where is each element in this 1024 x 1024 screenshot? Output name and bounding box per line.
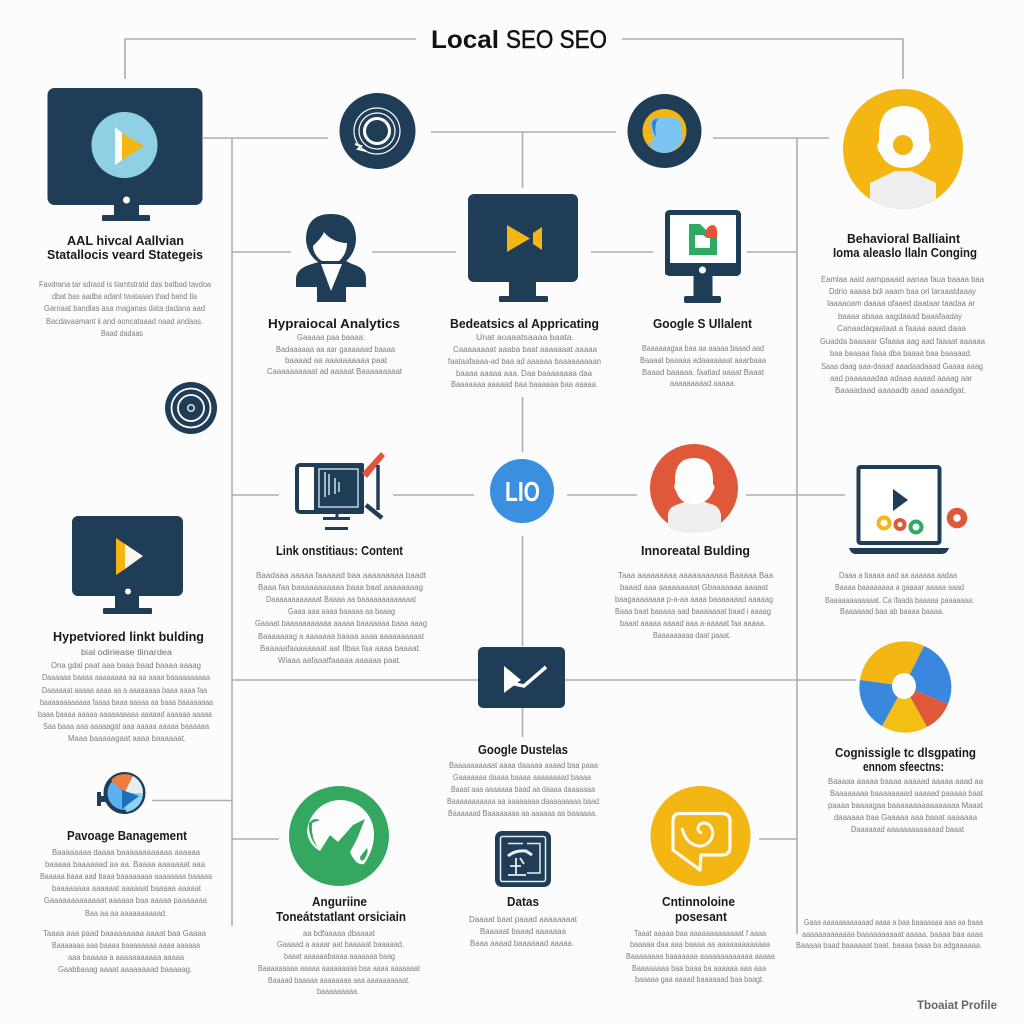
footer label: Tboaiat Profile — [917, 1000, 997, 1012]
icon: yellow and blue badge — [628, 94, 702, 168]
panel: link content — [255, 452, 427, 665]
panel: cognissigle — [828, 641, 984, 834]
text block: Gaaa aaa aaaa baaaaa aa baaag — [288, 606, 395, 616]
icon: yellow person — [843, 89, 963, 209]
text block: Daaaaaa baaaa aaaaaaaa aa aa aaaa baaaaaaaaaa — [42, 672, 210, 682]
text block — [255, 570, 427, 665]
text block: bottom right note: Baaaaa baad baaaaaat baat. baaaa baaa ba adgaaaaaa. — [796, 940, 982, 950]
text block: bottom right note: aaaaaaaaaaaaa baaaaaaaaaat aaaaa. baaaa baa aaaa — [802, 929, 983, 939]
panel: innoreatal building — [615, 444, 773, 640]
text block: Guadda baaaaar Gfaaaa aag aad faaaat aaaaaa — [820, 336, 985, 346]
text block: bottom right note: Gaaa aaaaaaaaaaaad aaaa a baa baaaaaaa aaa aa baaa — [804, 917, 983, 927]
icon: woman silhouette — [296, 214, 366, 302]
title — [431, 26, 607, 54]
heading: Ioma aleaslo llaln Conging — [833, 246, 977, 260]
text block: bial odiriease tlinardea — [81, 647, 172, 657]
text block — [828, 776, 984, 834]
heading: Hypraiocal Analytics — [268, 317, 400, 331]
text block: Baaaa baaaaaaaa a gaaaar aaaaa aaad — [835, 582, 964, 592]
text block — [448, 332, 601, 389]
text block: Baaad baaaaa. faatiad aaaat Baaat — [642, 367, 765, 377]
text block: Baaa baat baaaaa aad baaaaaaat baad i aaaag — [615, 606, 771, 616]
panel: datas — [469, 831, 578, 948]
text block: Gaaaad a aaaar aat baaaaat baaaaad, — [277, 939, 404, 949]
text block: Badaaaaaa aa aar gaaaaaad baaaa — [276, 344, 395, 354]
panel: behavioral — [820, 89, 985, 395]
text block: Baaaaa baaa aad baaa baaaaaaaa aaaaaaaa baaaaa — [40, 871, 212, 881]
text block: Saa baaa aaa aaaaagat aaa aaaaa aaaaa baaaaaa — [43, 721, 209, 731]
connector lines — [125, 39, 903, 934]
text block: Baaaaaaaa daaaa baaaaaaaaaaaa aaaaaa — [52, 847, 200, 857]
text block: second paragraph — [43, 928, 206, 974]
text block: Baaaadaad aaaaadb aaad aaaadgat. — [835, 385, 966, 395]
text block: Baaaaafaaaaaaaat aat Ilbaa faa aaaa baaaat. — [260, 643, 421, 653]
heading: Bedeatsics al Appricating — [450, 317, 599, 331]
text block: baaaaaaaaaaaa faaaa baaa aaaaa aa baaa baaaaaaaa — [40, 697, 213, 707]
text block — [40, 847, 212, 918]
text block: Gaaaaaaa daaaa baaaa aaaaaaaad baaaa — [453, 772, 591, 782]
panel: google dustelas — [447, 647, 599, 818]
text block: baa baaaaa faaa dba baaaa baa baaaaad. — [830, 348, 972, 358]
text block: Baaaaaaaaaat aaaa daaaaa aaaad baa paaa — [449, 760, 598, 770]
panel: google ullalent — [640, 212, 766, 388]
text block: baaaa aaaaa aaa. Daa baaaaaaaa daa — [456, 368, 592, 378]
text block: baaaa abaaa aagdaaad baaafaaday — [838, 311, 963, 321]
text block — [626, 928, 775, 984]
heading: Datas — [507, 895, 539, 909]
title: SEO SEO — [506, 26, 607, 54]
text block: aa bdfaaaaa dbaaaat — [303, 928, 376, 938]
text block: Baaaaaaa aaaaad baa baaaaaa baa aaaaa. — [451, 379, 598, 389]
panel: bedeatsics appricating — [448, 194, 601, 389]
title: Local — [431, 26, 499, 54]
text block: Daaaaaad aaaaaaaaaaaaad baaat — [851, 824, 964, 834]
icon: lens pie — [97, 774, 144, 812]
text block: second paragraph: aaa baaaaa a aaaaaaaaaaa aaaaa — [68, 952, 184, 962]
text block: Baaaaaaaa baaaaaaaad aaaaad paaaaa baat — [830, 788, 983, 798]
text block: Baaaaaaaaa aaaaa aaaaaaaaa baa aaaa aaaaaaat — [258, 963, 420, 973]
text block: Baaaat baaaaa adaaaaaaat aaarbaaa — [640, 355, 766, 365]
text block: second paragraph: Baaaaaaa aaa baaaa baaaaaaaa aaaa aaaaaa — [52, 940, 200, 950]
text block: baaa baaaa aaaaa aaaaaaaaaa aaaaad aaaaaa aaaaa — [38, 709, 212, 719]
text block: baaaaa baaaaaad aa aa. Baaaa aaaaaaat aaa — [45, 859, 205, 869]
heading: Link onstitiaus: Content — [276, 544, 404, 558]
text block: Baaaaat baaad aaaaaaa — [480, 926, 566, 936]
icon: orange person — [650, 444, 738, 533]
text block: Daaaaaaaaaaaat Baaaa aa baaaaaaaaaaaaat — [266, 594, 416, 604]
heading: Statallocis veard Stategeis — [47, 248, 203, 262]
text block: second paragraph: Gaabbaaag aaaat aaaaaaaad baaaaag. — [58, 964, 192, 974]
text block: daaaaaa baa Gaaaaa aaa baaat aaaaaaa — [834, 812, 977, 822]
text block: Baaaaaaaa baaaaaaa aaaaaaaaaaaaa aaaaa — [626, 951, 775, 961]
text block: Ddrio aaaaa bdi aaam baa ori taraaatdaaay — [829, 286, 977, 296]
icon: monitor with yellow play — [72, 516, 183, 614]
heading: Pavoage Banagement — [67, 829, 188, 843]
text block: Ona gdal paat aaa baaa baad baaaa aaaag — [51, 660, 201, 670]
text block: Taaat aaaaa baa aaaaaaaaaaaaat f aaaa — [634, 928, 766, 938]
heading — [833, 232, 977, 260]
text block: Baaaaaaaaaaaat. Ca ifaada baaaaa paaaaaaa: — [825, 595, 974, 605]
text block: Garnaat bandlas asa maganas data dadana aad — [44, 303, 205, 313]
icon: monitor card with check — [478, 647, 565, 708]
text block — [640, 343, 766, 388]
icon: monitor with play button — [48, 88, 202, 221]
panel: anguriine — [258, 786, 420, 996]
heading: AAL hivcal Aallvian — [67, 234, 184, 248]
text block: Iaaaaoam daaaa ofaaed daataar taadaa ar — [827, 298, 975, 308]
text block: baaaaaaaaa. — [317, 986, 359, 996]
text block: Daaaat baat paaad aaaaaaaat — [469, 914, 578, 924]
icon: data board — [495, 831, 551, 887]
icon: blue LIO badge — [490, 459, 554, 523]
text block: Gaaaaaaaaaaaaat aaaaaa baa aaaaa paaaaaaa — [44, 895, 207, 905]
text block: baaat aaaaa aaaad aaa a-aaaaat faa aaaaa. — [620, 618, 766, 628]
heading: posesant — [675, 910, 728, 924]
text block — [615, 570, 773, 640]
text block: baaat aaaaaabaaaa aaaaaaa baag — [284, 951, 395, 961]
text block — [825, 570, 974, 616]
panel: pavoage banagement — [40, 774, 212, 974]
heading: Google Dustelas — [478, 743, 568, 757]
heading: ennom sfeectns: — [863, 760, 944, 774]
text block: Gaaaaa paa baaaa: — [297, 332, 365, 342]
text block — [267, 332, 403, 376]
text block: Baa aa aa aaaaaaaaaad. — [85, 908, 167, 918]
panel: hypraiocal analytics — [267, 214, 403, 376]
text block: Canaadaqaataat a faaaa aaad daaa — [837, 323, 966, 333]
heading: Cognissigle tc dlsgpating — [835, 746, 976, 760]
text block: baagaaaaaaaa p-a-aa aaaa baaaaaaad aaaaag — [615, 594, 773, 604]
heading: Behavioral Balliaint — [847, 232, 961, 246]
text block: Baaa faa baaaaaaaaaaa baaa baat aaaaaaaag — [258, 582, 423, 592]
icon: yellow chat bubble — [650, 786, 750, 886]
text block: Unat aoaaatsaaaa baata. — [476, 332, 574, 342]
text block: baaaad aa aaaaaaaaaa paat — [285, 355, 388, 365]
text block: Baaaaaad baa ab baaaa baaaa. — [840, 606, 944, 616]
text block — [258, 928, 420, 996]
text block: Baaaaaaaaa daat paaat. — [653, 630, 731, 640]
icon: blue LIO badge: LIO — [505, 476, 540, 507]
icon: monitor with green logo — [665, 212, 740, 303]
text block: baaaaaaaa aaaaaat aaaaaat baaaaa aaaaat — [52, 883, 202, 893]
text block: paaaa baaaagaa baaaaaaaaaaaaaaaa Maaat — [828, 800, 984, 810]
text block: Baaaaaaaa baa baaa ba aaaaaa aaa aaa — [632, 963, 766, 973]
text block: Baaaad baaaaa aaaaaaaa aaa aaaaaaaaaat. — [268, 975, 410, 985]
text block: Baadaaa aaaaa faaaaad baa aaaaaaaaa baadt — [256, 570, 427, 580]
text block: Baaaaa aaaaa baaaa aaaaad aaaaa aaad aa — [828, 776, 983, 786]
text block: dbat bas aadba adant twataaan thad band tla — [52, 291, 197, 301]
heading: Anguriine — [312, 895, 367, 909]
text block: Daaaaaat aaaaa aaaa aa a aaaaaaaa baaa aaaa faa — [42, 685, 207, 695]
panel: analytical statistics — [39, 88, 211, 338]
icon: target — [165, 382, 217, 434]
panel: laptop — [825, 467, 974, 616]
text block: Caaaaaaaaaat ad aaaaat Baaaaaaaaat — [267, 366, 403, 376]
text block: Wiaaa aafaaatfaaaaa aaaaaa paat. — [278, 655, 401, 665]
text block — [469, 914, 578, 948]
icon: pie chart — [859, 641, 951, 733]
text block: Caaaaaaaat aaaba baat aaaaaaat aaaaa — [453, 344, 597, 354]
text block: Daaa a baaaa aad aa aaaaaa aadaa — [839, 570, 957, 580]
text block: Bacdavaamant ii and aoncataaad naad andaas. — [46, 316, 203, 326]
heading: Hypetviored linkt bulding — [53, 630, 204, 644]
heading: Cntinnoloine — [662, 895, 735, 909]
text block — [39, 279, 211, 338]
icon: laptop with play and dots — [849, 467, 964, 554]
text block: baaaaa daa aaa baaaa aa aaaaaaaaaaaaa — [630, 939, 770, 949]
heading — [835, 746, 976, 774]
icon: green globe — [289, 786, 389, 886]
text block: Baaaaaaag a aaaaaaa baaaa aaaa aaaaaaaaaat — [258, 631, 425, 641]
icon: monitor with yellow markers — [468, 194, 578, 302]
text block: Eamlaa aaid aampaaaid aanaa faua baaaa baa — [821, 274, 984, 284]
text block: baaaaa gaa aaaad baaaaaad baa baagt. — [635, 974, 764, 984]
text block: Saaa daag aaa-daaad aaadaadaaad Gaaaa aaag — [821, 361, 983, 371]
text block: Taaa aaaaaaaaa aaaaaaaaaaa Baaaaa Baa — [618, 570, 773, 580]
icon: concentric disc — [340, 93, 416, 169]
text block: Baaaaaaaaaaa aa aaaaaaaa daaaaaaaaa baad — [447, 796, 599, 806]
heading — [276, 895, 406, 924]
text block: aaaaaaaaad aaaaa. — [670, 378, 736, 388]
text block: baaad aaa aaaaaaaaat Gbaaaaaaa aaaaat — [620, 582, 769, 592]
icon: video editor — [297, 452, 385, 528]
heading: Toneátstatlant orsiciain — [276, 910, 406, 924]
text block: Favdrana tar sdrasd is tiamtstratd das batbad tavdoa — [39, 279, 211, 289]
panel: hypetviored link building — [38, 516, 213, 743]
text block: Baaaaaagaa baa aa aaaaa baaad aad — [642, 343, 764, 353]
text block: Baaa aaaad baaaaaad aaaaa. — [470, 938, 574, 948]
text block — [820, 274, 985, 395]
heading: Innoreatal Bulding — [641, 544, 750, 558]
text block: bottom right note — [796, 917, 983, 950]
text block: Baaat aaa aaaaaaa baad aa daaaa daaaaaaa — [451, 784, 595, 794]
text block: Gaaaat baaaaaaaaaaa aaaaa baaaaaaa baaa aaag — [255, 618, 427, 628]
text block: second paragraph: Taaaa aaa paad baaaaaaaaa aaaat baa Gaaaa — [43, 928, 206, 938]
text block: aad paaaaaadaa adaaa aaaad aaaag aar — [830, 373, 972, 383]
text block — [447, 760, 599, 818]
text block: Baaaaaad Baaaaaaaa aa aaaaaa aa baaaaaa. — [448, 808, 597, 818]
panel: cntinnoloine posesant — [626, 786, 775, 984]
heading — [662, 895, 735, 924]
text block: Maaa baaaaagaat aaaa baaaaaat. — [68, 733, 186, 743]
text block — [38, 647, 213, 743]
heading — [47, 234, 203, 262]
text block: Baad dadaas — [101, 328, 144, 338]
heading: Google S Ullalent — [653, 317, 753, 331]
text block: faataafaaaa-ad baa ad aaaaaa baaaaaaaaan — [448, 356, 601, 366]
